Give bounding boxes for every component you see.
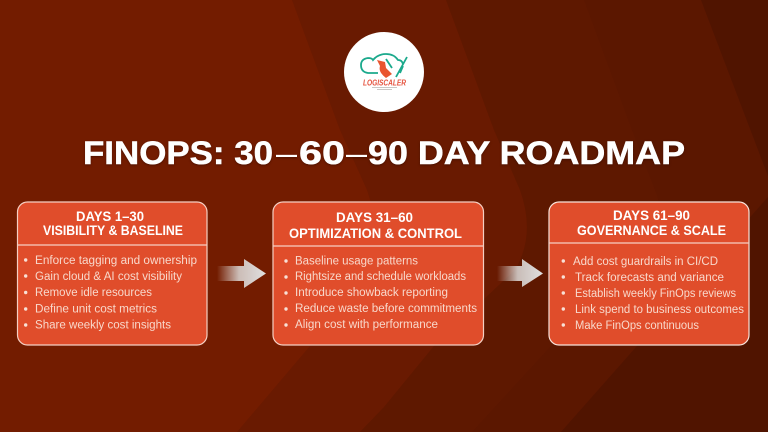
bullet list: Establish weekly FinOps reviews [575,288,736,300]
heading: VISIBILITY & BASELINE [43,223,183,238]
panel: days 31-60 [273,202,484,345]
heading: OPTIMIZATION & CONTROL [289,226,462,241]
title: FINOPS: 30 [83,135,273,171]
heading: DAYS 31–60 [336,210,413,225]
heading [577,208,726,238]
panel: days 61-90 [549,202,749,345]
icon: upward arrow [386,57,407,77]
bullet list [284,256,477,331]
bullet list: Share weekly cost insights [35,320,171,332]
bullet list: Add cost guardrails in CI/CD [573,256,718,268]
title: — [276,135,297,171]
arrow: days 1-30 to days 31-60 [217,259,266,288]
bullet list: Track forecasts and variance [575,272,724,284]
icon: flame [377,60,392,78]
bullet list: Gain cloud & AI cost visibility [35,271,182,283]
icon: cloud [361,54,403,73]
bullet list: Define unit cost metrics [35,304,157,316]
bullet list: Align cost with performance [295,319,438,331]
logo [344,32,424,112]
heading [289,210,462,241]
arrow: days 31-60 to days 61-90 [497,259,543,287]
bullet list: Rightsize and schedule workloads [295,271,466,283]
bullet list [24,255,197,332]
heading [43,209,183,238]
bullet list: Make FinOps continuous [575,320,699,332]
panel: days 1-30 [18,202,207,345]
bullet list: Reduce waste before commitments [295,303,477,315]
bullet list: Enforce tagging and ownership [35,255,197,267]
title: 90 DAY ROADMAP [368,135,685,171]
logo wordmark: LOGISCALER [363,78,406,88]
bullet list: Introduce showback reporting [295,287,448,299]
bullet list: Baseline usage patterns [295,256,418,268]
heading: DAYS 1–30 [76,209,144,224]
bullet list [562,256,744,332]
bullet list: Remove idle resources [35,287,152,299]
heading: DAYS 61–90 [613,208,690,223]
heading: GOVERNANCE & SCALE [577,223,726,238]
title: — [346,135,367,171]
bullet list: Link spend to business outcomes [575,304,744,316]
title: 60 [299,135,345,171]
